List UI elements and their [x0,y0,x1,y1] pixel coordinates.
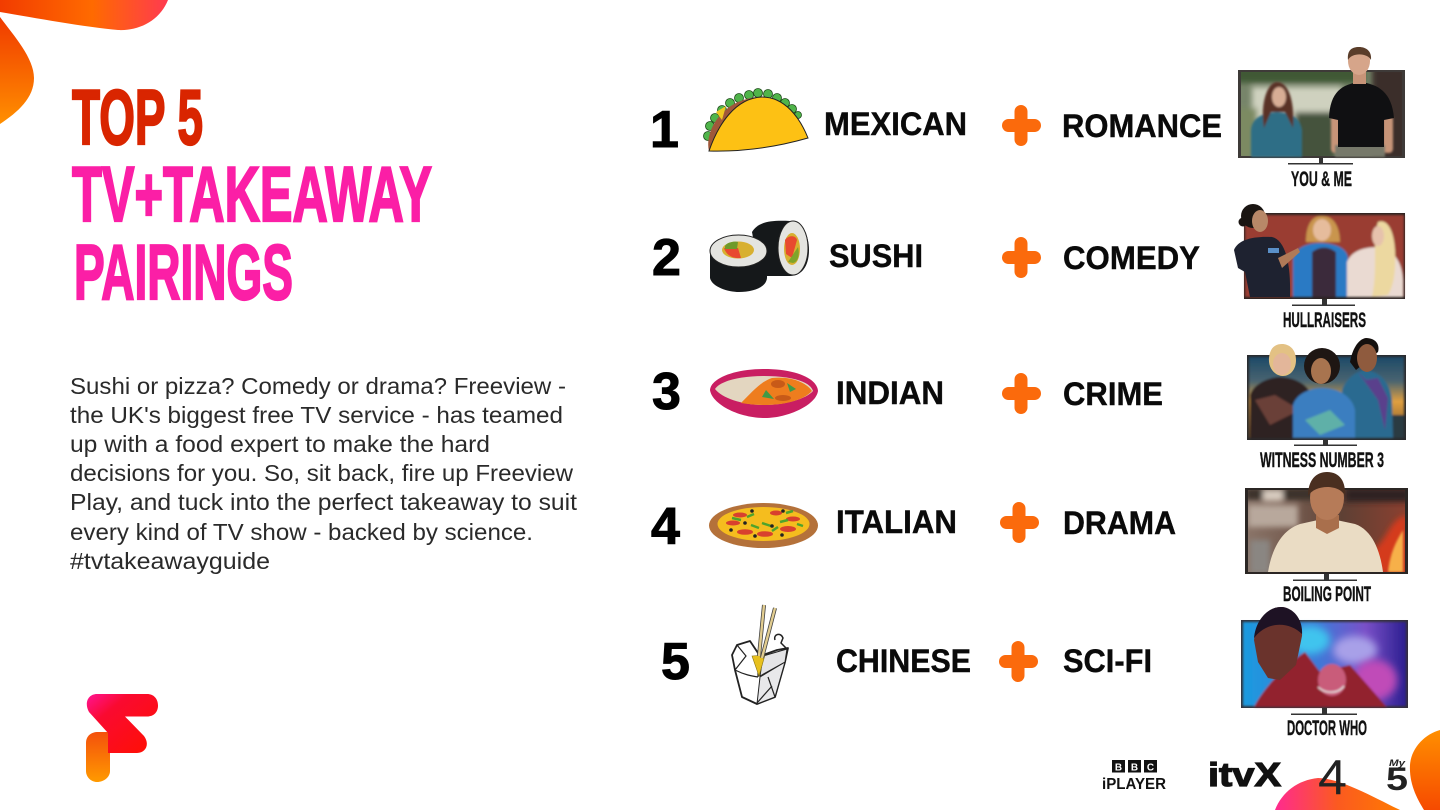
TV: Doctor Who [1241,607,1408,740]
TV: Boiling Point: BOILING POINT [1283,582,1371,606]
icon: curry bowl [710,369,818,418]
title: TV+TAKEAWAY [72,150,432,238]
intro text block: Sushi or pizza? Comedy or drama? Freeview - [70,373,566,399]
icon: plus [1008,112,1034,140]
logo: Channel 4: 4 [1318,751,1347,805]
icon: Chinese takeaway box [732,605,788,704]
label: Mexican: MEXICAN [824,106,967,142]
label: Comedy: COMEDY [1063,240,1200,276]
label: Crime: CRIME [1063,376,1163,412]
intro text block: up with a food expert to make the hard [70,431,490,457]
icon: Freeview logo [86,694,158,782]
label: Sushi: SUSHI [829,238,923,274]
logo: BBC iPlayer: B [1131,762,1138,774]
logo: BBC iPlayer: C [1147,762,1154,774]
intro text block: every kind of TV show - backed by science. [70,519,533,545]
icon: plus [1008,244,1034,272]
decorative corner: bottom right [1275,730,1440,810]
label: Romance: ROMANCE [1062,108,1222,144]
logo: ITVX: itvX [1208,756,1281,793]
row 4 rank number: 4 [651,498,680,556]
logo: My5: 5 [1386,761,1408,797]
intro text block: Play, and tuck into the perfect takeaway to suit [70,489,577,515]
TV: You & Me: YOU & ME [1291,167,1352,191]
label: Indian: INDIAN [836,375,944,411]
icon: pizza [709,503,818,548]
label: Chinese: CHINESE [836,643,971,679]
decorative corner: top left [0,0,168,124]
icon: plus [1006,648,1032,676]
row 5 rank number: 5 [661,633,690,691]
TV: Hullraisers [1234,204,1405,332]
icon: plus [1006,508,1032,536]
TV: Witness Number 3 [1247,338,1406,472]
icon: sushi rolls [710,221,809,292]
row 1 rank number: 1 [650,101,679,159]
label: Italian: ITALIAN [836,504,957,540]
intro text block: #tvtakeawayguide [70,548,270,574]
intro text block [70,373,577,574]
label: Drama: DRAMA [1063,505,1176,541]
title: TOP 5 [72,73,203,161]
intro text block: decisions for you. So, sit back, fire up Freeview [70,460,574,486]
row 2 rank number: 2 [652,229,681,287]
logo: BBC iPlayer: B [1115,762,1122,774]
TV: Boiling Point [1245,472,1410,606]
TV: You & Me [1235,47,1407,191]
TV: Doctor Who: DOCTOR WHO [1287,716,1367,740]
icon: plus [1008,380,1034,408]
icon: taco [704,88,808,151]
logo: My5: My [1389,758,1406,768]
row 3 rank number: 3 [652,363,681,421]
logo: BBC iPlayer: iPLAYER [1102,776,1166,793]
logo: BBC iPlayer [1102,760,1166,793]
TV: Hullraisers: HULLRAISERS [1283,308,1366,332]
title [72,73,432,316]
intro text block: the UK's biggest free TV service - has teamed [70,402,563,428]
label: Sci-Fi: SCI-FI [1063,643,1152,679]
title: PAIRINGS [74,228,293,316]
